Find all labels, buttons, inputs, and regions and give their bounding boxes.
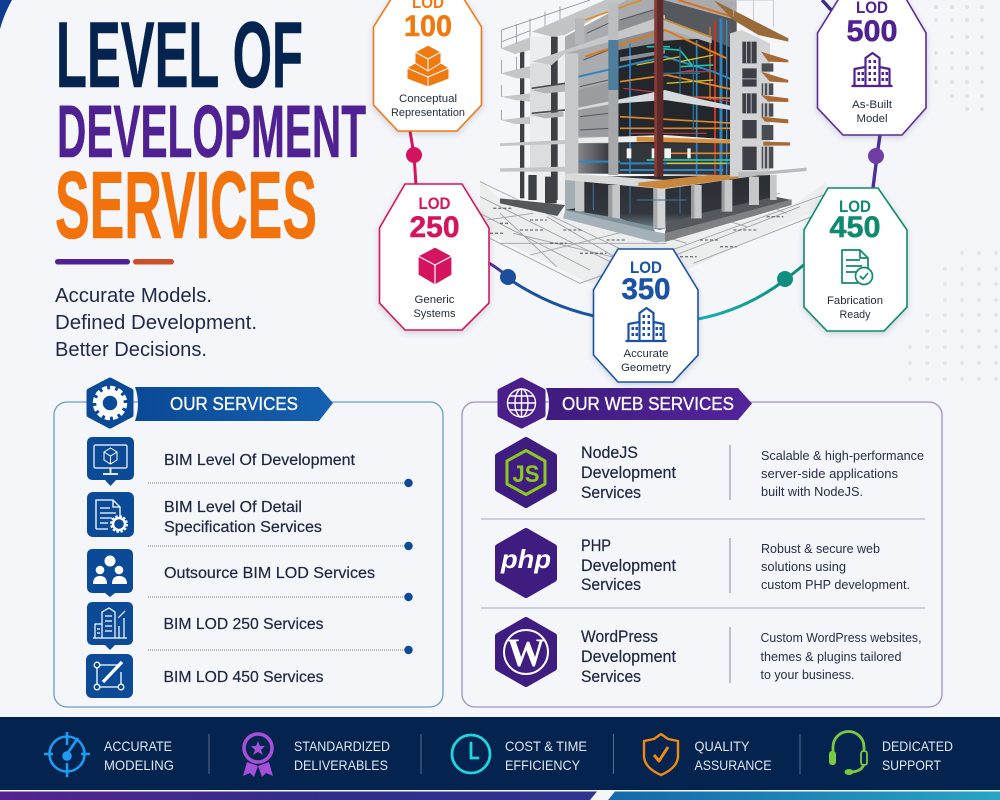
icon: ribbon medal	[243, 734, 273, 777]
feature: standardized deliverables: STANDARDIZED	[294, 738, 390, 754]
web services header banner: OUR WEB SERVICES	[562, 393, 734, 414]
badge: LOD 500: 500	[846, 15, 898, 48]
ground storey	[563, 175, 792, 242]
feature: quality assurance	[644, 734, 772, 775]
feature: accurate modeling	[44, 732, 174, 777]
services header banner	[135, 387, 333, 421]
row: PHP: solutions using	[761, 559, 846, 574]
connector: LOD 350 to LOD 450	[698, 264, 805, 319]
row: WordPress: Development	[581, 648, 676, 666]
row: WordPress: Custom WordPress websites,	[760, 630, 922, 645]
pipes and services	[578, 18, 737, 175]
badge: LOD 500: As-Built	[852, 99, 892, 111]
feature: cost and time efficiency: COST & TIME	[505, 738, 587, 754]
row 3: outsource BIM LOD: Outsource BIM LOD Services	[164, 565, 375, 582]
badge: LOD 450: LOD	[839, 197, 871, 216]
feature: standardized deliverables: DELIVERABLES	[294, 757, 388, 773]
row 1: BIM level of development	[87, 437, 413, 487]
badge: LOD 350: Accurate	[624, 348, 668, 360]
badge: LOD 450	[804, 188, 907, 331]
row: NodeJS: Development	[581, 464, 676, 482]
row: NodeJS: NodeJS	[581, 444, 638, 462]
icon: city skyline	[87, 602, 133, 650]
row: WordPress: WordPress	[581, 628, 658, 646]
panel: our services	[54, 380, 443, 707]
icon: team of people	[87, 549, 133, 597]
bottom colour strip	[0, 791, 1000, 800]
icon: cube	[418, 247, 452, 285]
icon: globe hexagon	[500, 380, 543, 426]
title	[55, 2, 366, 259]
row 1: BIM level of development: BIM Level Of Development	[164, 452, 356, 469]
badge: LOD 350: Geometry	[621, 362, 672, 374]
tagline	[55, 285, 257, 361]
feature: cost and time efficiency	[452, 735, 587, 773]
badge: LOD 100: 100	[404, 10, 452, 43]
icon: document with gear	[87, 492, 134, 537]
row: PHP: Development	[581, 557, 676, 575]
row: PHP	[498, 531, 910, 595]
row: WordPress: themes & plugins tailored	[760, 649, 902, 664]
icon: NodeJS hexagon	[498, 440, 554, 505]
icon: checked document	[842, 250, 872, 284]
badge: LOD 250: 250	[410, 211, 460, 244]
blueprint ground grid	[480, 180, 827, 283]
right wing	[713, 0, 807, 178]
icon: PHP hexagon: php	[500, 544, 551, 574]
row: PHP: Services	[581, 576, 641, 594]
icon: NodeJS hexagon: JS	[512, 461, 540, 488]
row: NodeJS: server-side applications	[761, 466, 898, 481]
icon: monitor with cube	[87, 437, 134, 486]
icon: stacked blocks	[407, 45, 449, 87]
badge: LOD 350: LOD	[630, 258, 662, 277]
title: SERVICES	[55, 152, 317, 259]
badge: LOD 450: Ready	[840, 309, 871, 321]
row: PHP: Robust & secure web	[761, 541, 880, 556]
row 3: outsource BIM LOD	[87, 549, 413, 601]
row: WordPress: to your business.	[760, 667, 854, 682]
row 4: BIM LOD 250: BIM LOD 250 Services	[164, 616, 324, 633]
badge: LOD 250: Generic	[414, 294, 455, 306]
tagline: Accurate Models.	[55, 285, 212, 307]
icon: gear hexagon	[89, 380, 131, 426]
row 5: BIM LOD 450	[86, 654, 324, 698]
row: PHP: custom PHP development.	[761, 577, 910, 592]
row 4: BIM LOD 250	[87, 602, 413, 654]
badge: LOD 350	[594, 249, 698, 382]
icon: crosshair gauge	[44, 732, 90, 777]
title: DEVELOPMENT	[57, 90, 366, 173]
badge: LOD 500	[818, 0, 926, 135]
icon: office building	[852, 53, 892, 86]
footer band	[0, 717, 1000, 790]
icon: PHP hexagon	[498, 531, 554, 595]
feature: accurate modeling: ACCURATE	[104, 738, 172, 754]
connector: LOD 100 to LOD 250	[406, 131, 422, 185]
connector: LOD 450 to LOD 500	[868, 135, 884, 188]
row: WordPress: Services	[581, 668, 641, 686]
feature: dedicated support: SUPPORT	[882, 757, 941, 773]
row: NodeJS	[498, 440, 924, 505]
feature: standardized deliverables	[243, 734, 390, 777]
icon: office building	[626, 308, 666, 341]
icon: WordPress hexagon	[498, 620, 554, 684]
badge: LOD 250: LOD	[418, 194, 450, 213]
icon: drafting frame with pencil	[86, 654, 133, 698]
title accent bars	[55, 259, 174, 264]
row: WordPress	[498, 620, 922, 686]
icon: headset	[829, 731, 867, 775]
main structure core	[565, 0, 737, 175]
row 2: BIM level of detail	[87, 492, 413, 550]
dot pattern: lower right	[908, 251, 998, 381]
badge: LOD 500: Model	[856, 113, 888, 125]
row 5: BIM LOD 450: BIM LOD 450 Services	[164, 669, 324, 686]
row: NodeJS: Scalable & high-performance	[761, 448, 924, 463]
feature: accurate modeling: MODELING	[104, 757, 174, 773]
icon: WordPress hexagon: W	[507, 630, 545, 675]
row 2: BIM level of detail: Specification Services	[164, 519, 322, 536]
badge: LOD 350: 350	[622, 273, 670, 306]
building illustration	[480, 0, 827, 283]
services header banner: OUR SERVICES	[170, 393, 298, 414]
concrete floor slabs and columns	[532, 0, 738, 189]
row: NodeJS: Services	[581, 484, 641, 502]
feature: cost and time efficiency: EFFICIENCY	[505, 757, 581, 773]
badge: LOD 100	[374, 0, 482, 131]
feature: quality assurance: ASSURANCE	[694, 757, 772, 773]
feature: dedicated support: DEDICATED	[882, 738, 953, 754]
feature: quality assurance: QUALITY	[694, 738, 750, 754]
row 2: BIM level of detail: BIM Level Of Detail	[164, 499, 302, 516]
corner accent arc	[0, 0, 12, 29]
left wing	[500, 0, 590, 216]
connector: LOD 250 to LOD 350	[489, 263, 594, 316]
row: NodeJS: built with NodeJS.	[761, 484, 863, 499]
badge: LOD 250	[380, 184, 489, 330]
dot pattern: top right	[934, 5, 984, 111]
badge: LOD 100: Conceptual	[399, 93, 457, 105]
icon: shield check	[644, 734, 678, 775]
tagline: Better Decisions.	[55, 339, 207, 361]
badge: LOD 450: 450	[830, 211, 880, 244]
feature: dedicated support	[829, 731, 953, 775]
badge: LOD 250: Systems	[414, 308, 456, 320]
title: LEVEL OF	[56, 2, 303, 107]
badge: LOD 450: Fabrication	[827, 295, 883, 307]
web services header banner	[546, 388, 752, 420]
row: PHP: PHP	[581, 537, 611, 555]
badge: LOD 100: Representation	[391, 107, 465, 119]
connector: LOD 500 top stub	[822, 0, 833, 12]
icon: clock	[452, 735, 490, 773]
panel: our web services	[462, 380, 942, 707]
tagline: Defined Development.	[55, 312, 257, 334]
